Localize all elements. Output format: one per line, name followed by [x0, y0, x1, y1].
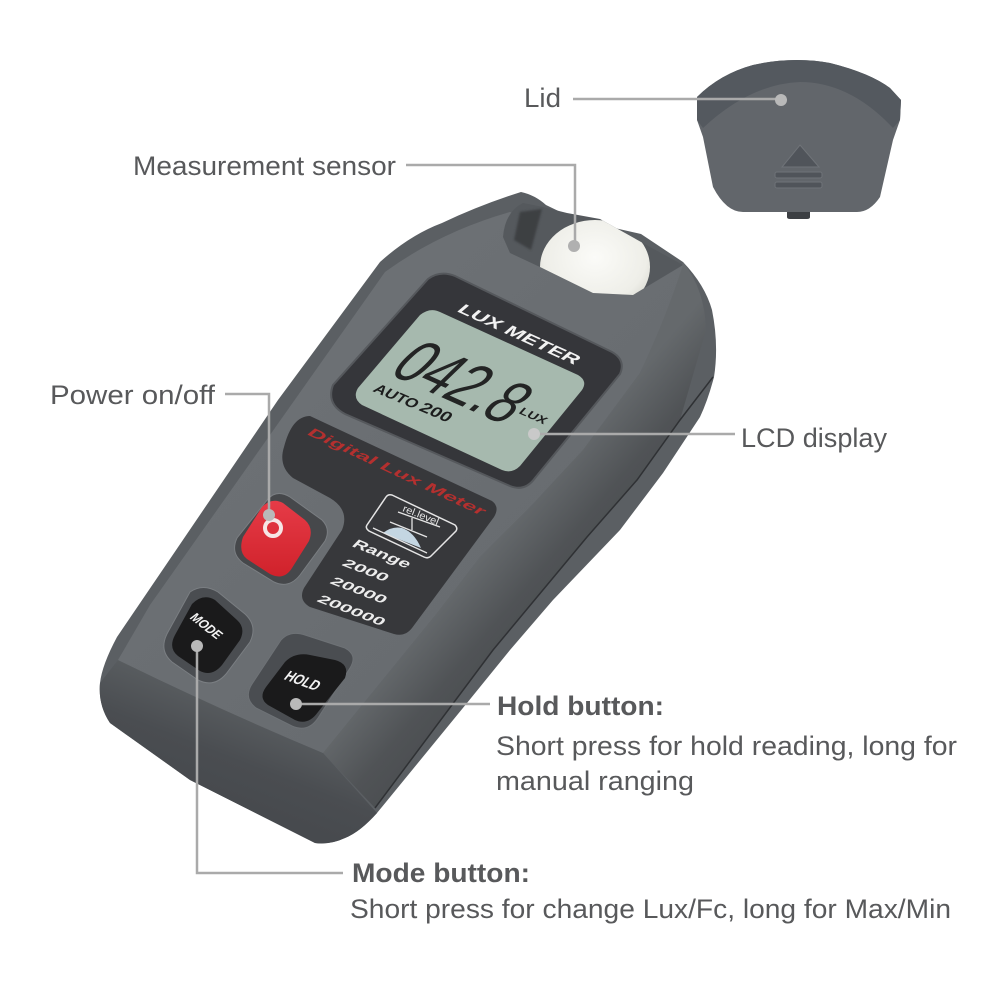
leader: measurement sensor [406, 165, 580, 252]
leader: mode [191, 640, 343, 873]
power button [235, 493, 327, 584]
label: power on/off: Power on/off [50, 380, 216, 410]
LCD text: LUX METER [453, 302, 585, 368]
plate text: 20000 [327, 575, 391, 606]
lower bevel [100, 660, 377, 843]
LCD bezel [331, 274, 622, 488]
plate text: Range [349, 537, 416, 571]
icon: power symbol [265, 520, 281, 536]
leader: hold [290, 698, 490, 710]
measurement sensor ball [540, 220, 650, 295]
LCD text: LUX [516, 406, 550, 427]
text: hold description: Short press for hold reading, long for [496, 731, 957, 761]
rel level icon: rel.level [401, 504, 440, 528]
body silhouette [100, 192, 716, 843]
LCD text [369, 302, 585, 436]
text: mode description: Short press for change Lux/Fc, long for Max/Min [350, 894, 951, 924]
heading: mode button: Mode button: [352, 858, 530, 888]
front face [118, 212, 683, 753]
brand plate [282, 416, 497, 635]
text: hold description line 2: manual ranging [496, 766, 694, 796]
hold button [248, 633, 353, 728]
leader: power [225, 394, 275, 521]
rel level icon [366, 495, 457, 558]
plate text: Digital Lux Meter [304, 426, 492, 518]
leader: LCD [528, 428, 735, 440]
plate text [304, 426, 492, 628]
plate text: 2000 [339, 557, 393, 584]
mode button: MODE [187, 611, 226, 641]
leader: lid [573, 94, 787, 106]
seam line [375, 377, 713, 808]
sensor recess [503, 203, 683, 295]
LCD text: 042.8 [376, 328, 550, 436]
lid [697, 60, 901, 219]
hold button: HOLD [280, 669, 324, 694]
label: lid: Lid [524, 83, 561, 113]
label: measurement sensor: Measurement sensor [133, 151, 396, 181]
meter body [100, 192, 716, 843]
plate text: 200000 [314, 593, 389, 628]
LCD text: 200 [415, 400, 456, 426]
LCD screen [356, 310, 584, 471]
mode button [164, 588, 253, 683]
right side band [323, 262, 706, 808]
heading: hold button: Hold button: [497, 691, 664, 721]
label: LCD display: LCD display [741, 423, 887, 453]
LCD text: AUTO [369, 382, 422, 412]
icon: eject arrow [775, 145, 822, 188]
